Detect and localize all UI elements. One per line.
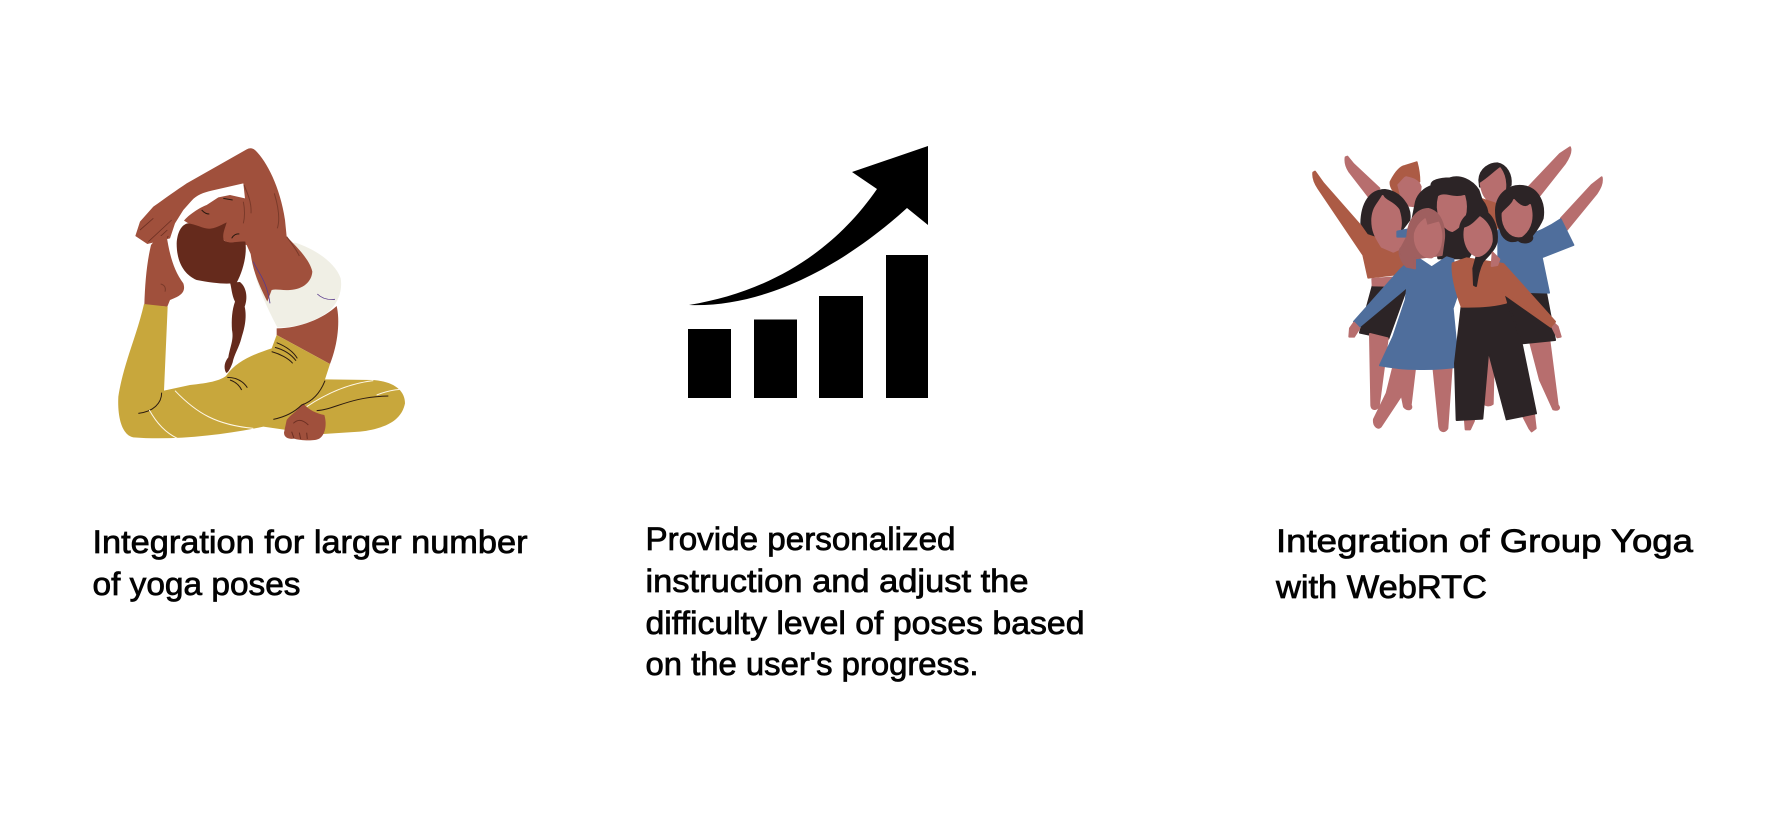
back woman face [1398,177,1421,207]
shoulder [1492,253,1499,266]
left waist and leg [1370,277,1407,409]
text: personalized instruction: instruction and adjust the [646,563,1028,599]
right skirt [1503,290,1555,343]
raised foot [144,236,184,307]
text: larger number of poses: Integration for larger number [92,524,528,560]
text: group yoga with WebRTC [1275,523,1693,605]
text: group yoga with WebRTC: with WebRTC [1275,569,1487,605]
arm, shoulder and face [135,148,312,302]
mauve hair and ponytail [1400,209,1444,268]
braid [225,282,246,373]
blue dress woman's legs [1374,367,1452,431]
text: personalized instruction [646,521,1084,682]
bar 4 [886,255,928,398]
black trousers [1455,302,1536,420]
feet [1465,414,1536,431]
text: larger number of poses [92,524,528,602]
front woman face [1464,217,1492,256]
white top [250,243,341,327]
left woman raised arm and top [1313,172,1405,278]
rust shirt [1453,258,1555,327]
back right legs [1484,340,1559,410]
blue dress [1354,257,1458,369]
bar 2 [754,320,797,398]
midriff [277,306,338,364]
hand fingers [140,218,172,245]
right woman face [1503,200,1532,236]
icon: yoga pose illustration [118,148,405,440]
central dark hair woman [1413,177,1488,258]
right woman hair [1496,186,1543,242]
text: personalized instruction: Provide personalized [646,521,956,557]
left woman hair [1361,190,1410,237]
blue woman face [1415,219,1441,257]
bar 3 [819,296,863,398]
icon: group of women [1313,147,1602,431]
icon: growth bar chart with rising arrow [688,146,928,398]
top right woman hair [1479,163,1511,188]
clothing folds and skin lines [138,185,388,439]
text: larger number of poses: of yoga poses [92,566,300,602]
front woman dark hair [1460,210,1497,286]
central woman face [1438,195,1466,231]
right blue shirt [1498,219,1573,293]
top right woman collar [1479,198,1507,230]
blue sleeve behind [1397,229,1408,237]
bar 1 [688,329,731,398]
text: personalized instruction: difficulty level of poses based [646,605,1084,641]
hands [1349,323,1561,337]
back woman orange hair [1391,162,1419,195]
ear [223,229,243,242]
left woman face and neck [1372,196,1410,252]
text: personalized instruction: on the user's progress. [646,646,978,682]
top right woman face [1481,168,1505,202]
text: group yoga with WebRTC: Integration of Group Yoga [1276,523,1693,559]
back arms [1345,147,1602,230]
left skirt [1360,286,1407,339]
yellow leggings [118,304,405,438]
bottom foot [284,403,326,440]
rising arrow [689,146,928,305]
hair [177,222,246,284]
